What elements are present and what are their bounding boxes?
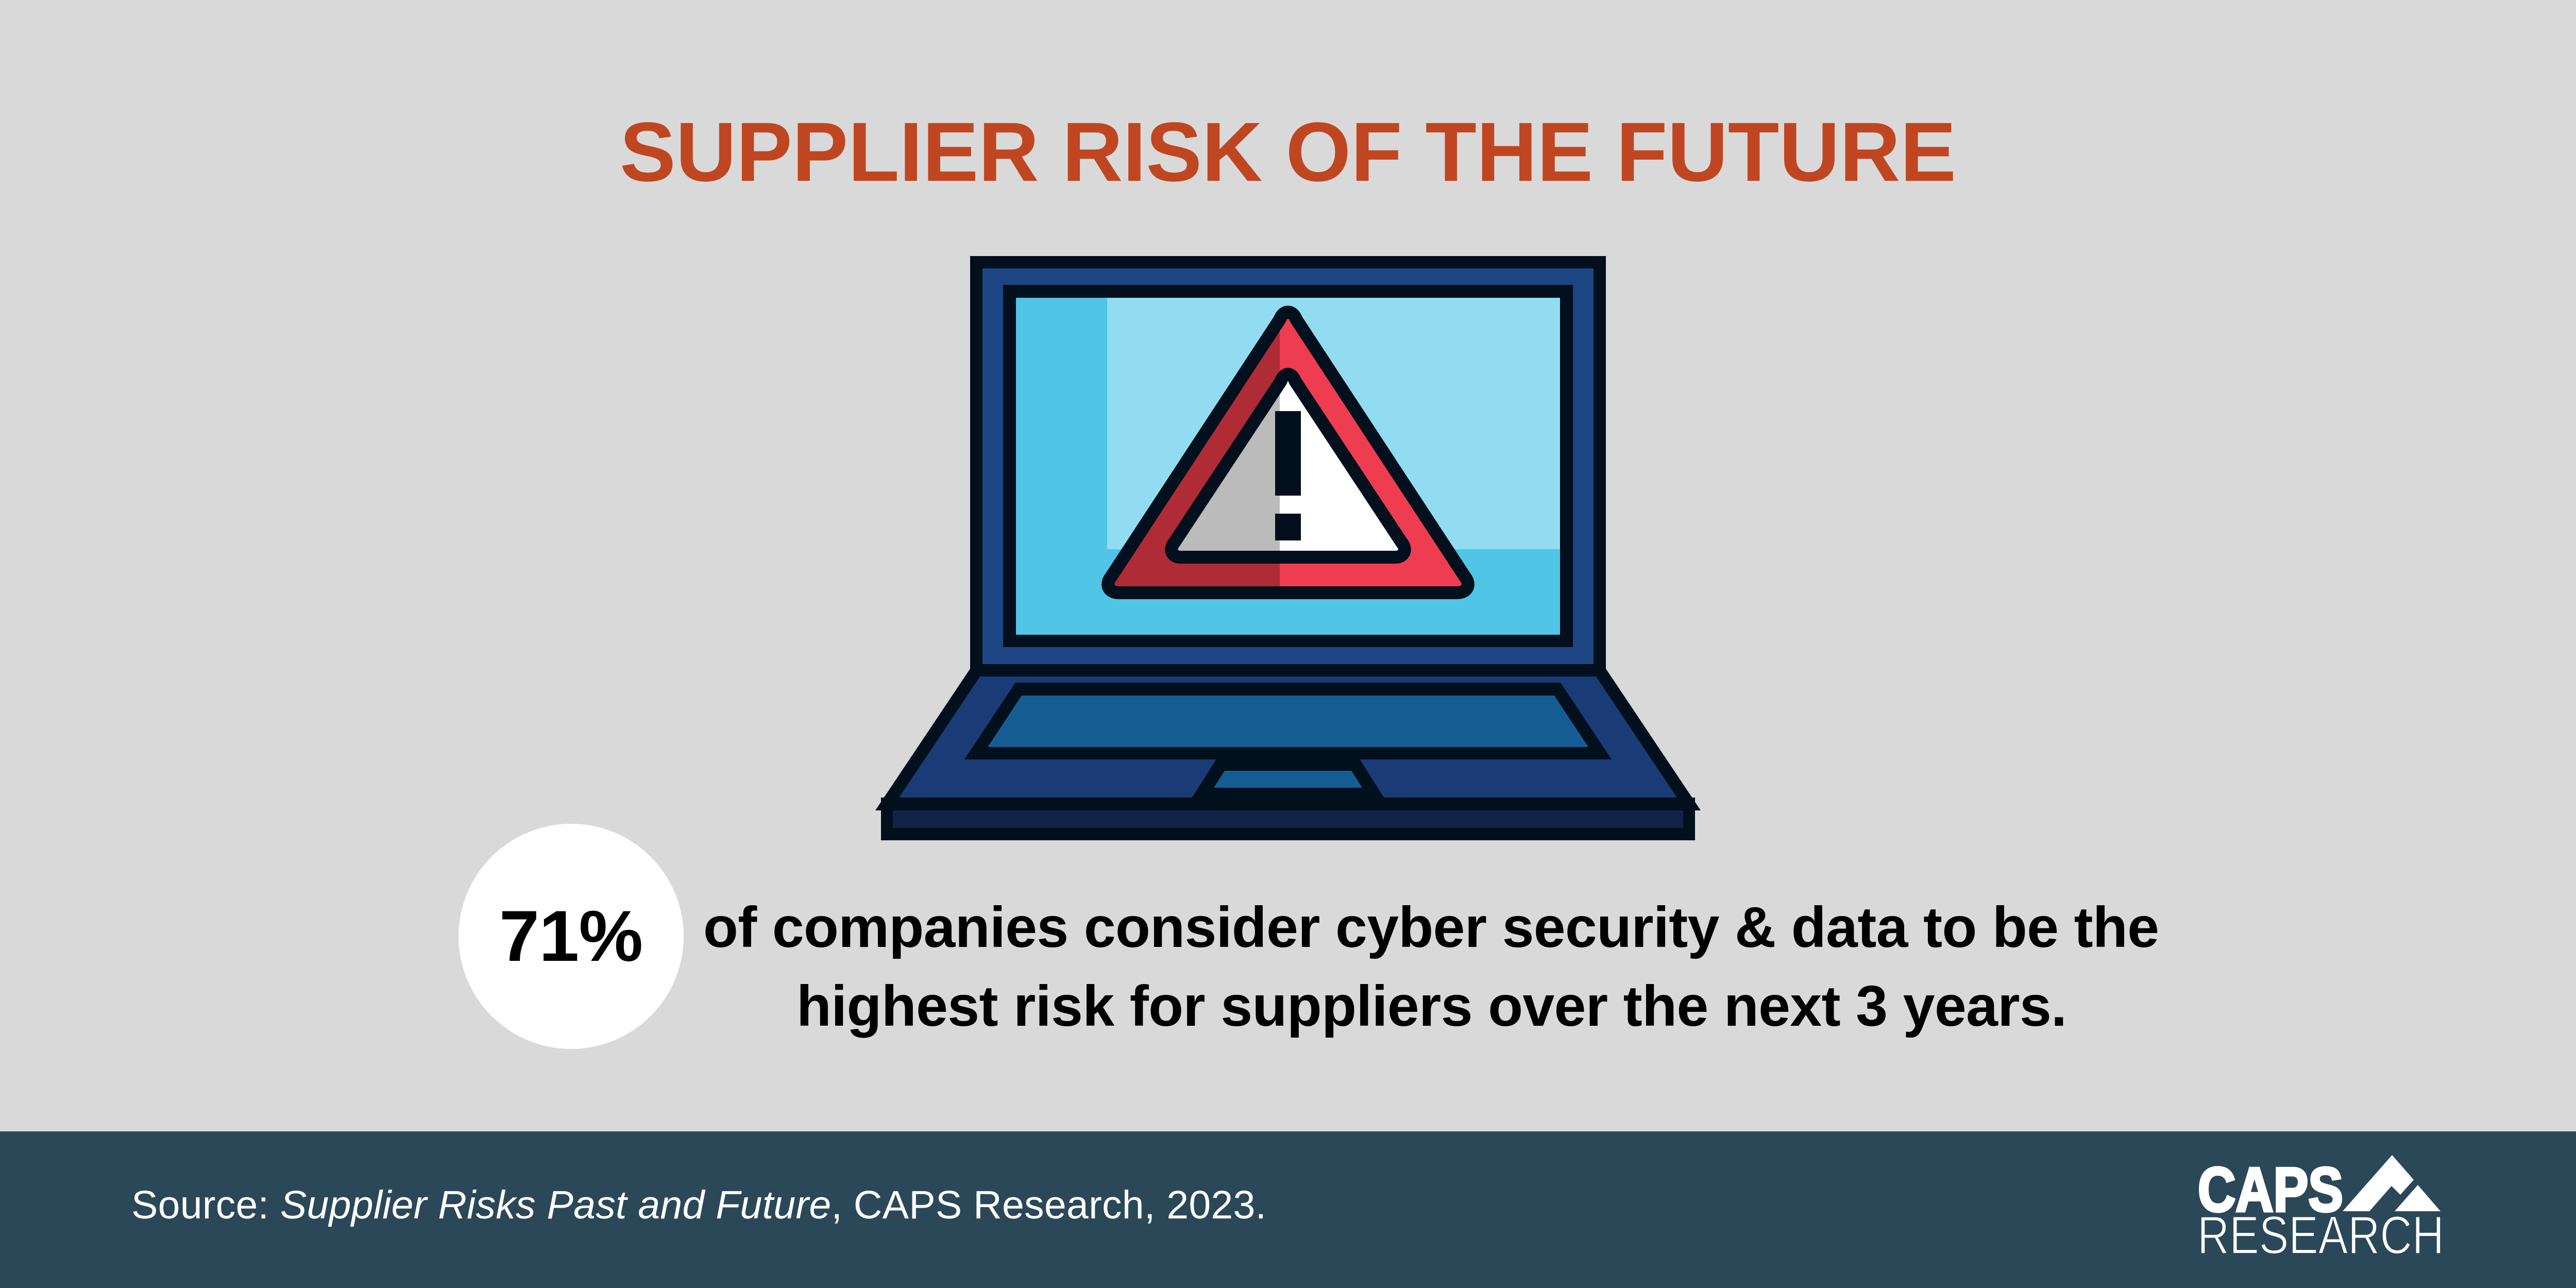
source note: Source: Supplier Risks Past and Future, CAPS Research, 2023. [131, 1183, 1266, 1227]
statement text [703, 895, 2159, 1038]
footer band [0, 1131, 2576, 1288]
title: SUPPLIER RISK OF THE FUTURE [620, 105, 1956, 199]
logo: CAPS Research [2197, 1155, 2444, 1265]
stat value: 71% [499, 895, 643, 976]
logo wordmark CAPS: CAPS [2198, 1155, 2343, 1225]
laptop touchpad [1192, 757, 1384, 798]
laptop lid [970, 256, 1606, 676]
laptop screen [1003, 285, 1573, 647]
warning triangle outer [1108, 312, 1468, 592]
laptop keyboard [964, 683, 1612, 759]
stat circle [459, 824, 684, 1049]
statement text: highest risk for suppliers over the next 3 years. [796, 974, 2067, 1038]
warning triangle inner [1172, 374, 1404, 557]
laptop base [875, 669, 1701, 840]
logo wordmark RESEARCH: RESEARCH [2197, 1206, 2444, 1265]
icon: laptop with warning triangle [875, 256, 1701, 840]
statement text: of companies consider cyber security & data to be the [703, 895, 2159, 959]
logo mountains [2343, 1155, 2441, 1211]
exclamation mark [1275, 411, 1301, 540]
